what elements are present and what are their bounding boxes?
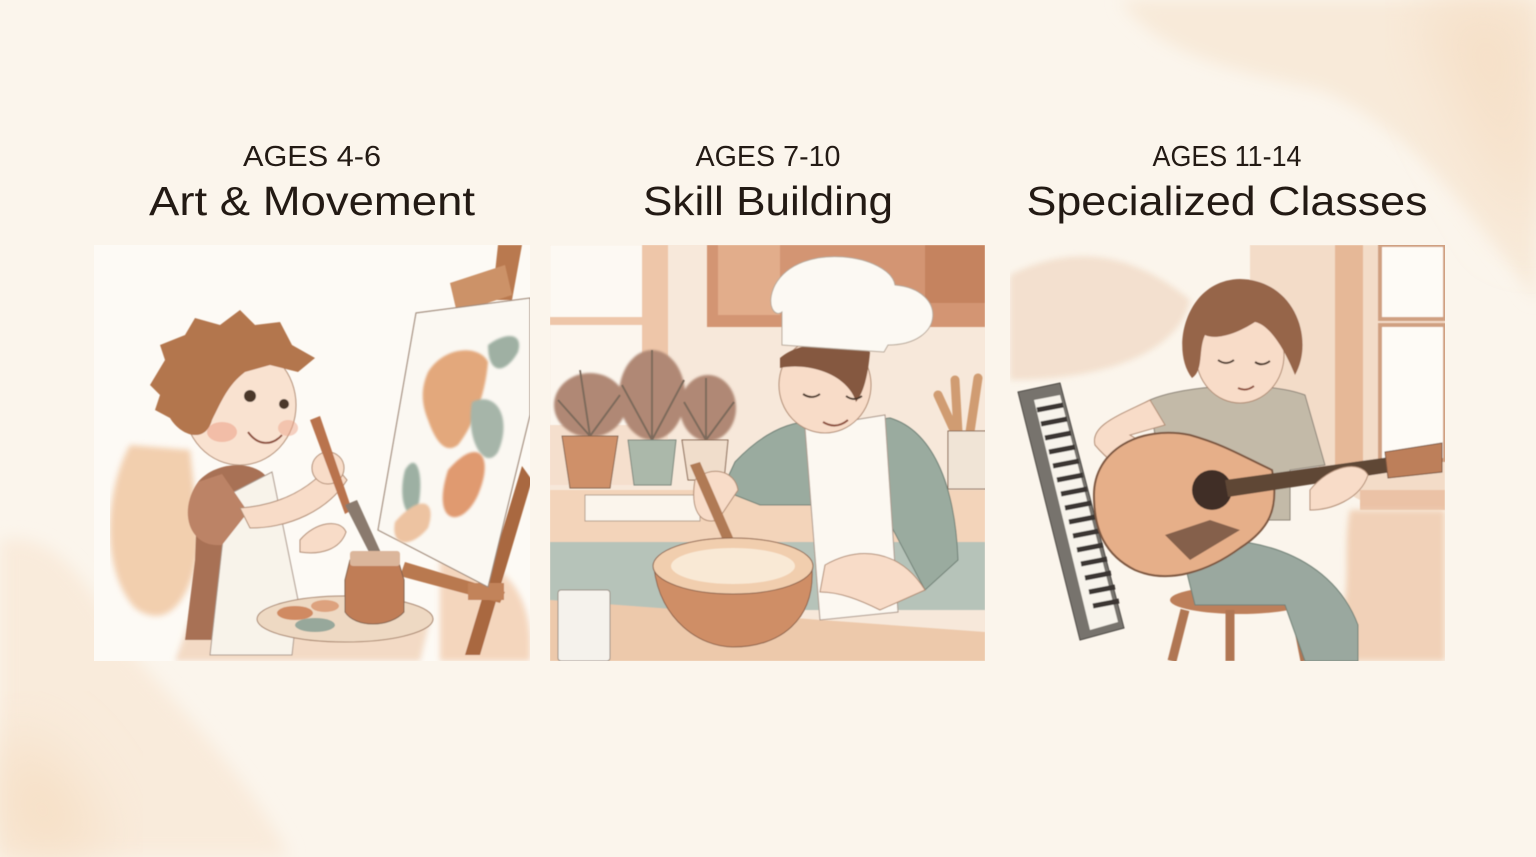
milk glass (558, 590, 610, 661)
window (550, 245, 668, 485)
heading: ages 4-6: Art & Movement (149, 178, 476, 224)
heading: ages 11-14 (1026, 141, 1428, 224)
heading: ages 7-10 (643, 141, 893, 224)
heading: ages 11-14: Specialized Classes (1026, 178, 1428, 224)
window (1320, 245, 1445, 661)
heading: ages 4-6: AGES 4-6 (243, 141, 381, 173)
panel: girl playing guitar (1009, 245, 1445, 661)
heading: ages 7-10: Skill Building (643, 178, 893, 224)
heading: ages 11-14: AGES 11-14 (1152, 141, 1302, 173)
utensil jar (938, 378, 988, 489)
herb pots (554, 350, 736, 488)
keyboard (1018, 383, 1124, 640)
panel: boy baking (550, 245, 988, 661)
canvas painting (378, 298, 530, 587)
heading: ages 7-10: AGES 7-10 (696, 141, 840, 173)
icon: easel (400, 245, 532, 655)
child figure (150, 310, 347, 655)
girl figure (1094, 279, 1358, 661)
guitar (1094, 433, 1442, 576)
mixing bowl (653, 462, 813, 647)
panel: child painting (94, 245, 532, 661)
boy figure (694, 257, 958, 620)
counter and lower cabinets (550, 490, 985, 661)
kitchen cabinets (707, 245, 985, 327)
heading: ages 4-6 (149, 141, 476, 224)
icon: paintbrush (310, 416, 382, 558)
palette and paint jar (257, 551, 433, 642)
stool (1170, 586, 1310, 661)
